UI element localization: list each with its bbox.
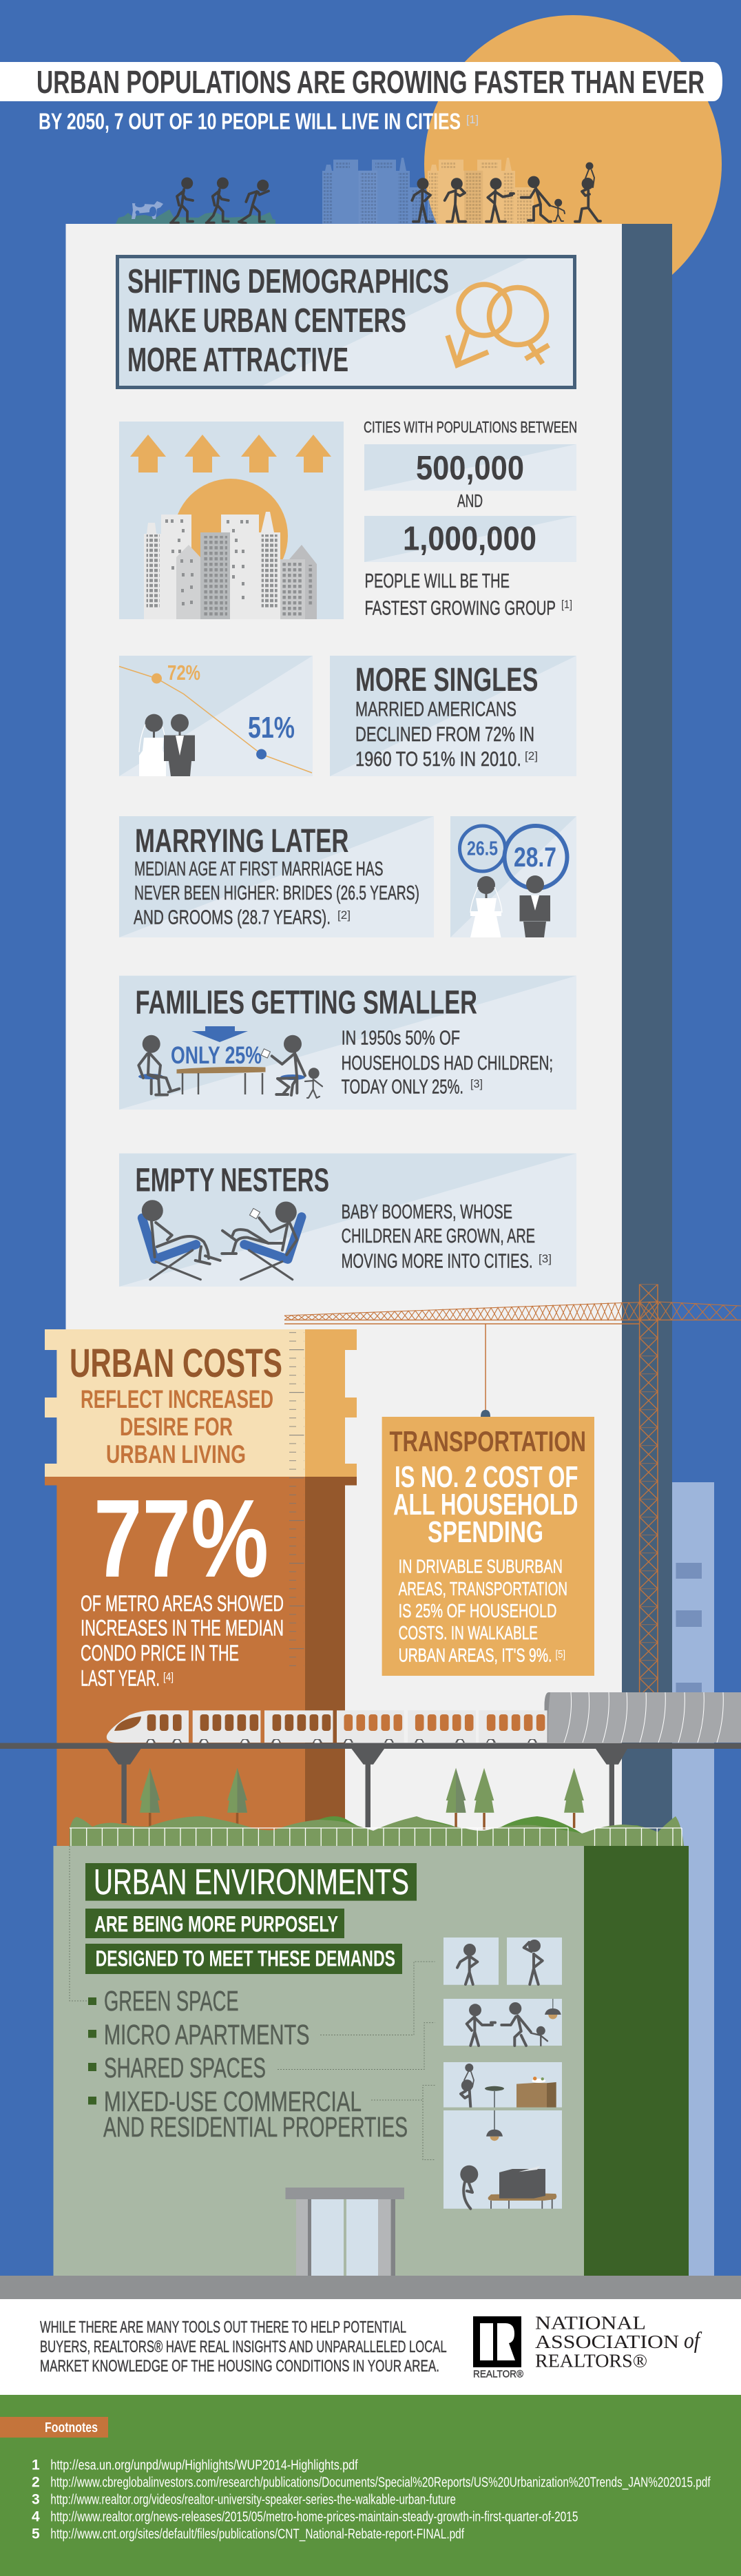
panel: marriage ages: 28.7 [514,842,556,873]
bullet list [88,1985,408,2143]
panel: transportation: IS NO. 2 COST OF [395,1461,578,1494]
crane tower [640,1284,658,1693]
figure: walker 3 [239,180,269,223]
footnote 1: 1 [32,2458,40,2473]
panel: urban costs building: REFLECT INCREASED [81,1384,273,1413]
main white tower [66,224,622,1846]
tunnel [545,1692,741,1743]
figure: walker 1 [171,178,193,223]
footnote 3: http://www.realtor.org/videos/realtor-university-speaker-series-the-walkable-urban-future [50,2493,456,2508]
skyline silhouette (blue side) [322,158,425,224]
sun [424,15,722,313]
stat box: 1,000,000 [364,516,576,562]
icon: cow [132,201,163,219]
subheading line 2 [85,1944,402,1974]
elevated rail and pylons [0,1743,741,1827]
panel: families getting smaller: IN 1950s 50% OF [342,1028,460,1050]
panel: more singles: [2] [525,749,538,762]
closing statement: MARKET KNOWLEDGE OF THE HOUSING CONDITIONS IN YOUR AREA. [40,2357,439,2376]
panel: urban costs building: 77% [94,1477,269,1601]
panel: transportation: COSTS. IN WALKABLE [399,1622,538,1643]
panel: more singles: MORE SINGLES [355,662,539,698]
panel: marriage ages [450,816,576,937]
people arriving in the city [412,163,601,222]
figure: parent [521,176,551,222]
floor strip between windows [443,2108,562,2110]
bullet list: AND RESIDENTIAL PROPERTIES [103,2111,408,2143]
panel: city growth illustration [119,422,344,619]
windows with residents [443,1938,562,2209]
stat box: 500,000: 500,000 [416,449,524,487]
panel: marriage ages: 26.5 [467,838,498,860]
figure: person 3 [486,178,514,222]
train nose car [107,1710,189,1743]
national association of realtors wordmark: REALTORS® [535,2351,647,2371]
train car 6 [479,1710,547,1743]
subtitle: BY 2050, 7 OUT OF 10 PEOPLE WILL LIVE IN CITIES [39,109,461,135]
footnote 2: 2 [32,2475,40,2491]
panel: families getting smaller [119,976,576,1110]
tree 5 [564,1768,584,1828]
panel: urban costs building: LAST YEAR. [81,1666,160,1691]
bullet list: SHARED SPACES [104,2052,266,2084]
closing statement [40,2318,447,2376]
skyline silhouette (sun side) [428,158,534,224]
window 4 [443,2062,562,2108]
icon: up arrows [130,435,331,472]
figure: person 1 [412,178,432,222]
text block: fastest growing group: FASTEST GROWING GROUP [365,598,556,620]
realtor logo: REALTOR® [473,2369,523,2380]
panel: marrying later: AND GROOMS (28.7 YEARS). [134,907,331,929]
subtitle: [1] [466,113,479,126]
footnotes label: Footnotes [45,2420,98,2435]
panel: more singles: MARRIED AMERICANS [355,698,516,721]
bullet list: MIXED-USE COMMERCIAL [104,2086,362,2117]
line chart: 51% [248,711,295,745]
icon: bride and groom [139,714,195,776]
text block: fastest growing group [364,418,577,620]
panel: shifting demographics heading [117,256,574,387]
grass on roof [116,209,275,224]
tree 2 [227,1768,247,1828]
panel: empty nesters: MOVING MORE INTO CITIES. [342,1251,533,1273]
crane [284,1284,741,1693]
train car 2 [193,1710,260,1743]
panel: marrying later: MEDIAN AGE AT FIRST MARRIAGE HAS [134,858,383,880]
national association of realtors wordmark [535,2313,702,2371]
panel: empty nesters: BABY BOOMERS, WHOSE [342,1201,512,1223]
panel: families getting smaller: HOUSEHOLDS HAD CHILDREN; [342,1052,553,1074]
figure: adult carrying child [575,163,601,222]
panel: empty nesters: EMPTY NESTERS [135,1163,329,1198]
tree 1 [140,1768,160,1828]
green building [54,1846,689,2276]
panel: urban costs building: [4] [163,1670,174,1683]
entrance door [285,2188,404,2276]
panel: transportation: TRANSPORTATION [390,1425,586,1457]
line chart: 72% [167,661,200,685]
panel: more singles: DECLINED FROM 72% IN [355,723,534,746]
panel: empty nesters: [3] [539,1252,552,1265]
panel: transportation [382,1417,594,1676]
panel: transportation: IN DRIVABLE SUBURBAN [399,1556,563,1577]
tree 3 [446,1768,466,1828]
text block: fastest growing group: PEOPLE WILL BE THE [365,570,510,592]
figure: seated adult right with mug [261,1035,305,1095]
panel: shifting demographics heading: SHIFTING DEMOGRAPHICS [127,262,449,300]
panel: empty nesters: CHILDREN ARE GROWN, ARE [342,1225,535,1247]
crane hook [481,1410,490,1417]
figure: child [305,1068,322,1098]
tower shaded side [622,224,672,1846]
stat box: 1,000,000: 1,000,000 [403,519,536,558]
panel: transportation: [5] [555,1649,565,1661]
people walking in from the country [171,178,269,223]
national association of realtors wordmark: ASSOCIATION [535,2331,679,2352]
panel: urban costs building: OF METRO AREAS SHOWED [81,1591,284,1616]
panel: transportation: IS 25% OF HOUSEHOLD [399,1600,556,1621]
figure: walker 2 [207,178,229,223]
ruler ticks [289,1332,304,1674]
footnote 4: http://www.realtor.org/news-releases/2015/05/metro-home-prices-maintain-steady-growth-in-first-quarter-of-2015 [50,2510,578,2525]
realtor logo [473,2316,523,2380]
footer white band [0,2299,741,2395]
window 5 [443,2110,562,2209]
tree 4 [474,1768,494,1829]
stat box: 500,000 [364,444,576,490]
figure: reclining adult right with mug [222,1201,302,1280]
window 2 [507,1938,562,1985]
closing statement: BUYERS, REALTORS® HAVE REAL INSIGHTS AND UNPARALLELED LOCAL [40,2338,447,2356]
panel: transportation: SPENDING [428,1516,543,1549]
train wheels [146,1739,537,1743]
bullet list: GREEN SPACE [104,1985,239,2017]
panel: marrying later: MARRYING LATER [135,823,348,860]
crane cable [485,1324,486,1413]
footnote 5: http://www.cnt.org/sites/default/files/publications/CNT_National-Rebate-report-FINAL.pdf [50,2527,464,2542]
chart: age circles [460,826,567,889]
icon: gender symbols [448,284,549,365]
back building light blue [672,1482,714,2276]
text block: fastest growing group: AND [457,490,483,511]
panel: urban costs building: DESIRE FOR [120,1412,233,1441]
panel: married chart [119,656,313,776]
panel: transportation: ALL HOUSEHOLD [393,1488,578,1521]
figure: child [550,199,565,221]
window 1 [443,1938,499,1985]
line chart [119,661,312,773]
subheading line 1 [85,1909,344,1938]
train car 3 [264,1710,333,1743]
dotted leader lines [70,1846,435,2160]
panel: more singles: 1960 TO 51% IN 2010. [355,748,521,771]
text block: fastest growing group: CITIES WITH POPULATIONS BETWEEN [364,418,577,436]
footnote 5: 5 [32,2526,40,2542]
train car 4 [337,1710,404,1743]
crane jib [284,1302,741,1324]
panel: transportation: AREAS, TRANSPORTATION [399,1578,567,1599]
building body [45,1329,357,1846]
footnote 1: http://esa.un.org/unpd/wup/Highlights/WUP2014-Highlights.pdf [50,2458,358,2473]
icon: bride and groom [470,875,550,937]
national association of realtors wordmark: NATIONAL [535,2313,646,2334]
footnotes panel [0,2395,741,2576]
figure: person 2 [445,178,466,222]
trees [140,1768,584,1829]
panel: shifting demographics heading: MORE ATTRACTIVE [127,341,348,379]
panel: families getting smaller: FAMILIES GETTING SMALLER [135,985,477,1021]
train car 5 [408,1710,476,1743]
icon: down arrow [191,1026,248,1042]
subheading line 2: DESIGNED TO MEET THESE DEMANDS [96,1946,395,1971]
panel: urban costs building: URBAN COSTS [70,1341,282,1386]
illustration: table [177,1067,265,1094]
closing statement: WHILE THERE ARE MANY TOOLS OUT THERE TO HELP POTENTIAL [40,2318,406,2337]
footnotes label [0,2417,108,2438]
lamp [545,1999,561,2019]
panel: urban costs building: CONDO PRICE IN THE [81,1641,239,1665]
footnote 4: 4 [32,2509,40,2525]
panel: more singles [330,656,576,776]
panel: urban costs building: URBAN LIVING [106,1440,246,1468]
panel: families getting smaller: ONLY 25% [171,1042,262,1069]
panel: families getting smaller: TODAY ONLY 25%. [342,1077,463,1099]
ground [0,2276,741,2299]
panel: urban costs building [45,1329,357,1846]
train [107,1710,547,1745]
subheading line 1: ARE BEING MORE PURPOSELY [94,1912,338,1937]
figure: seated adult left [138,1035,179,1095]
window 3 [443,1999,562,2046]
panel: marrying later: [2] [337,908,351,922]
text block: fastest growing group: [1] [561,598,572,611]
panel: marrying later [119,816,434,937]
figure: reclining adult left [142,1200,220,1280]
illustration: skyline [144,512,317,619]
bullet list: MICRO APARTMENTS [104,2019,310,2050]
panel: marrying later: NEVER BEEN HIGHER: BRIDES (26.5 YEARS) [134,882,419,904]
panel: urban costs building: INCREASES IN THE MEDIAN [81,1616,284,1641]
panel: shifting demographics heading: MAKE URBAN CENTERS [127,302,406,340]
national association of realtors wordmark: of [684,2328,702,2354]
heading: urban environments: URBAN ENVIRONMENTS [94,1862,409,1902]
panel: families getting smaller: [3] [470,1077,483,1090]
panel: transportation: URBAN AREAS, IT'S 9%. [399,1645,552,1666]
footnote 3: 3 [32,2492,40,2508]
rooftop hills [70,1816,684,1846]
panel: empty nesters [119,1154,576,1287]
